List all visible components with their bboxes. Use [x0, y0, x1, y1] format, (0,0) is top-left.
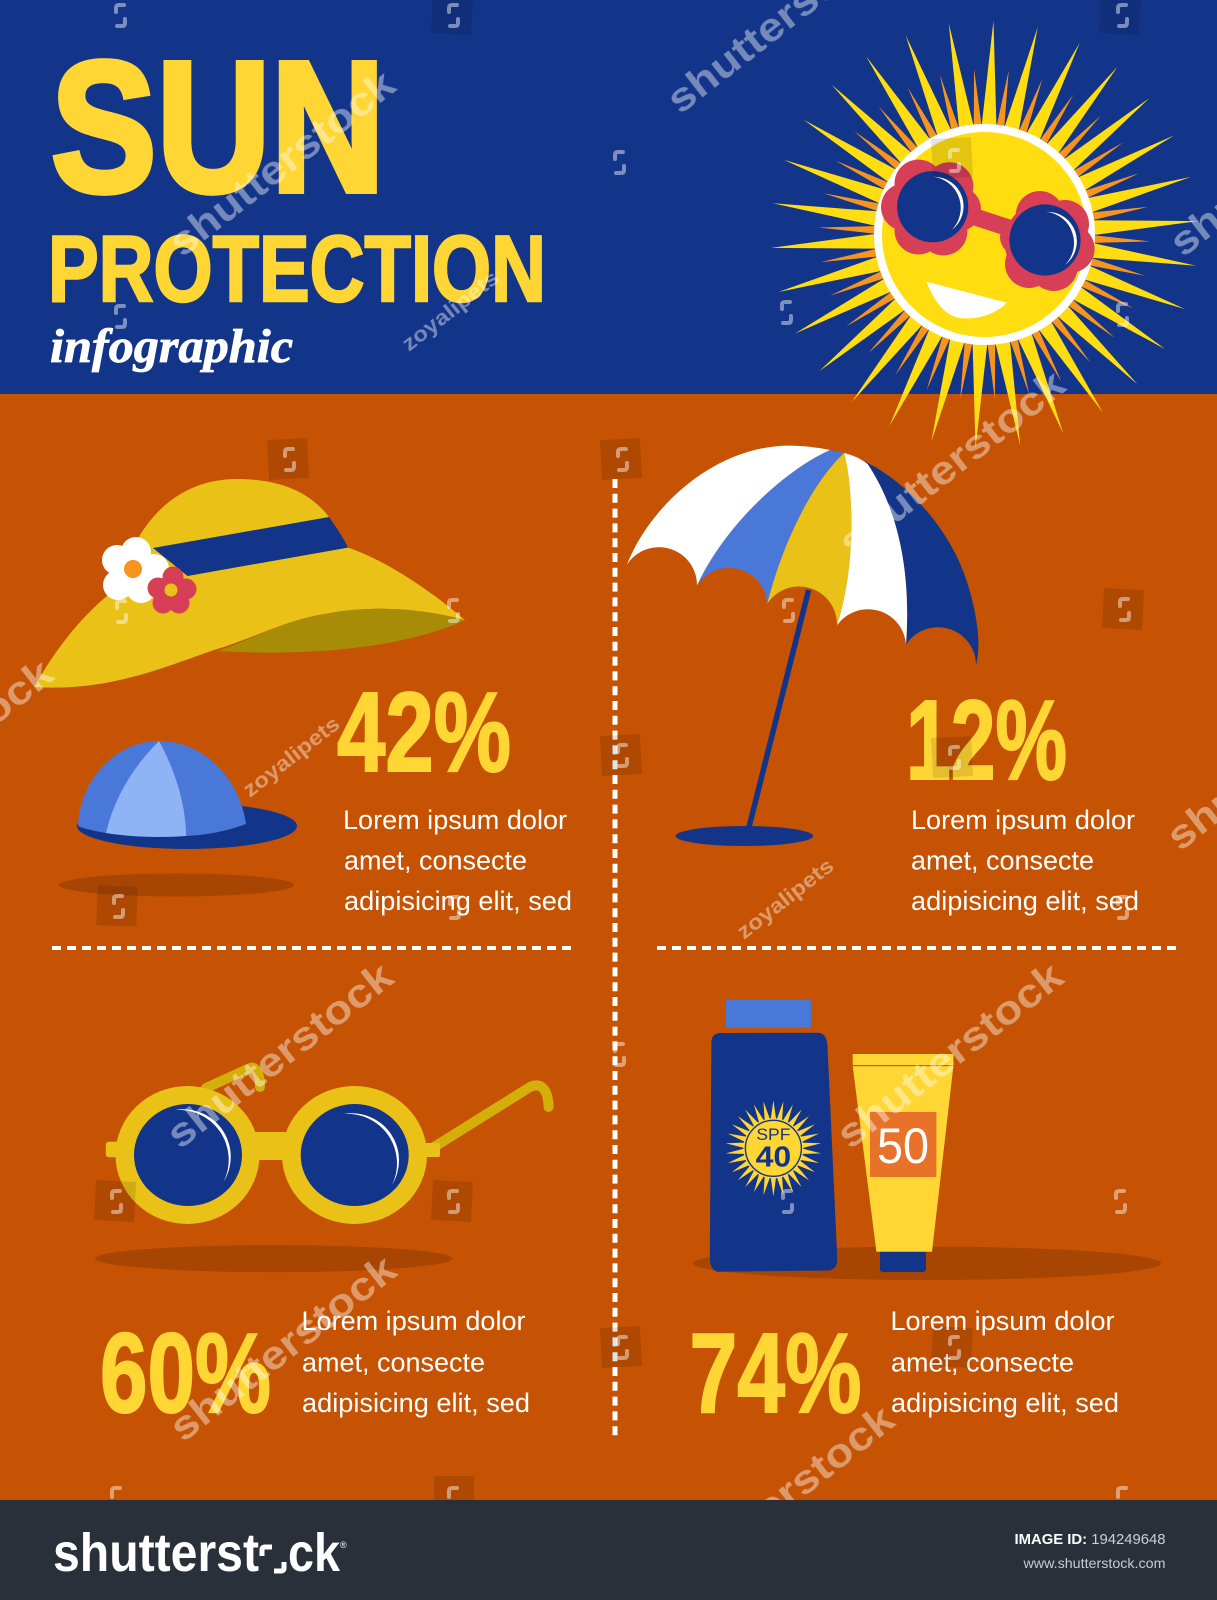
watermark: shutterstock diagonal text: shutterstock: [161, 1246, 405, 1450]
cap shadow: [59, 874, 294, 896]
panel: sunglasses: [95, 1068, 549, 1436]
text: hat description: amet, consecte: [344, 846, 527, 876]
panel: blue header: [0, 0, 1217, 394]
badge: SPF sun: [725, 1100, 821, 1196]
panel: sunscreen: [690, 1000, 1161, 1436]
icon: yellow sunglasses: [106, 1068, 549, 1224]
watermark: contributor name: zoyalipets: [398, 266, 503, 356]
text: sunscreen description: Lorem ipsum dolor: [890, 1306, 1115, 1336]
watermark: contributor name: zoyalipets: [239, 712, 344, 802]
icon: umbrella base: [676, 826, 813, 846]
watermark: shutterstock diagonal text: shutterstock: [828, 953, 1072, 1157]
watermark: shutterstock diagonal text: shutterstock: [830, 361, 1074, 565]
text: hat description: [343, 805, 572, 916]
icon: straw sun hat: [34, 479, 465, 688]
text: sunscreen description: adipisicing elit, sed: [891, 1388, 1119, 1418]
divider: right horizontal dotted line: [657, 946, 1181, 950]
panel: umbrella: [627, 446, 1139, 916]
watermark: contributor name: [239, 266, 838, 944]
stat: 74%: 74%: [690, 1310, 862, 1436]
panel: orange background: [0, 394, 1217, 1500]
smile: [927, 282, 1007, 318]
footer logo: shutterstock: shutterst: [53, 1523, 259, 1583]
badge: SPF sun: SPF: [756, 1125, 790, 1144]
icon: umbrella canopy: [627, 446, 978, 665]
text: sunscreen description: amet, consecte: [891, 1348, 1074, 1378]
title: SUN: SUN: [51, 24, 385, 231]
icon: umbrella pole: [749, 590, 809, 828]
icon: SPF 50 tube: 50: [877, 1118, 929, 1174]
footer: image id: IMAGE ID: 194249648: [1014, 1531, 1166, 1548]
icon: blue cap: [77, 741, 297, 849]
stat: 60%: 60%: [100, 1310, 271, 1436]
watermark: shutterstock diagonal text: shutterstock: [659, 1396, 903, 1600]
text: sunglasses description: Lorem ipsum dolor: [302, 1306, 526, 1336]
text: sunscreen description: [890, 1306, 1119, 1418]
glasses shadow: [95, 1245, 453, 1272]
icon: SPF 50 tube: [853, 1054, 953, 1272]
icon: smiling sun with sunglasses: [770, 20, 1199, 449]
subtitle: infographic: infographic: [50, 320, 293, 373]
footer logo: shutterstock: ®: [340, 1540, 347, 1550]
text: sunglasses description: amet, consecte: [302, 1348, 485, 1378]
title: PROTECTION: PROTECTION: [48, 216, 546, 321]
text: umbrella description: adipisicing elit, sed: [911, 886, 1139, 916]
watermark: shutterstock diagonal text: shutterstock: [160, 61, 404, 265]
footer logo: shutterstock: ck: [288, 1523, 341, 1583]
stat: 42%: 42%: [337, 669, 511, 795]
text: umbrella description: Lorem ipsum dolor: [911, 805, 1135, 835]
panel: hats: [34, 479, 572, 916]
flower sunglasses frame: [881, 160, 1095, 291]
icon: SPF 40 bottle: [710, 1000, 837, 1272]
text: umbrella description: amet, consecte: [911, 846, 1094, 876]
text: umbrella description: [911, 805, 1139, 916]
badge: SPF sun: 40: [756, 1142, 791, 1174]
footer: website: www.shutterstock.com: [1022, 1555, 1166, 1571]
divider: vertical dotted line: [612, 479, 618, 1437]
watermark: contributor name: zoyalipets: [733, 854, 838, 944]
text: hat description: adipisicing elit, sed: [344, 886, 572, 916]
footer bar: [0, 1500, 1217, 1600]
stat: 12%: 12%: [906, 677, 1067, 803]
text: sunglasses description: [302, 1306, 530, 1418]
sunscreen shadow: [693, 1247, 1161, 1280]
watermark logo marks: [112, 5, 1129, 1497]
text: sunglasses description: adipisicing elit, sed: [302, 1388, 530, 1418]
sunglasses lenses: [897, 171, 1081, 276]
watermark: shutterstock diagonal text: shutterstock: [158, 953, 402, 1157]
divider: left horizontal dotted line: [52, 946, 575, 950]
text: hat description: Lorem ipsum dolor: [343, 805, 567, 835]
sun face: [874, 124, 1095, 345]
sun rays: [770, 20, 1199, 449]
